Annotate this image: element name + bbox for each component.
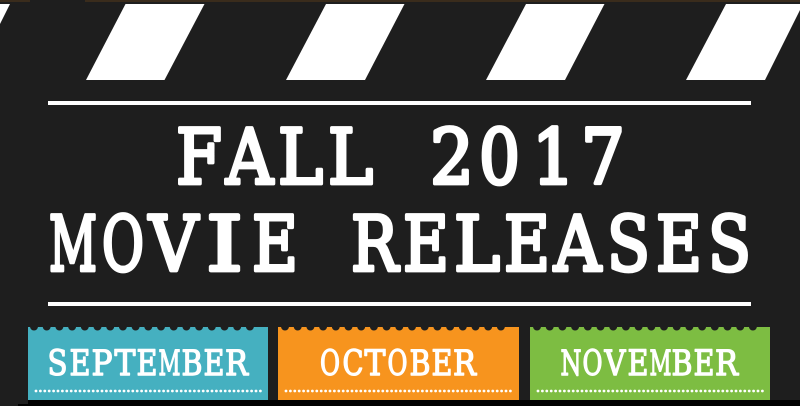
ticket: october: E [432, 344, 452, 384]
bottom divider [48, 302, 751, 306]
title: A [225, 112, 274, 202]
ticket: september: R [225, 344, 249, 384]
title: E [403, 200, 449, 288]
title: S [708, 200, 751, 288]
ticket: october: C [342, 344, 364, 384]
ticket: november: B [672, 344, 692, 384]
title [49, 112, 751, 288]
ticket: october: T [364, 344, 386, 384]
ticket: september: E [136, 344, 158, 384]
ticket: november: O [582, 344, 602, 384]
title: L [328, 112, 373, 202]
title: 0 [479, 112, 520, 202]
title: S [607, 200, 650, 288]
top divider [48, 101, 751, 105]
ticket: november [530, 326, 770, 400]
ticket: september: S [48, 344, 68, 384]
ticket: september: E [204, 344, 224, 384]
title: L [454, 200, 500, 288]
title: R [351, 200, 400, 288]
ticket: september: P [92, 344, 112, 384]
ticket: november: E [694, 344, 714, 384]
title: F [176, 112, 222, 202]
title: E [656, 200, 702, 288]
title: V [148, 200, 199, 288]
ticket: november: M [650, 344, 672, 384]
ticket: october: O [388, 344, 408, 384]
ticket: october: R [453, 344, 477, 384]
ticket: september: T [114, 344, 136, 384]
title: 1 [532, 112, 575, 202]
title: E [252, 200, 298, 288]
ticket: september: M [158, 344, 180, 384]
ticket: november: N [560, 344, 582, 384]
title: A [553, 200, 602, 288]
title: L [278, 112, 323, 202]
title: 2 [430, 112, 474, 202]
title: 7 [581, 112, 625, 202]
ticket: november: V [604, 344, 626, 384]
ticket: september: E [70, 344, 90, 384]
ticket: october [278, 326, 519, 400]
title: I [206, 200, 243, 288]
title: O [102, 200, 144, 288]
clapper stripes [0, 4, 800, 80]
ticket: october: O [320, 344, 340, 384]
title: E [504, 200, 550, 288]
ticket: october: B [410, 344, 430, 384]
ticket: september: B [182, 344, 202, 384]
title: M [49, 200, 97, 288]
ticket: november: E [628, 344, 648, 384]
ticket: september [28, 326, 268, 400]
ticket: november: R [715, 344, 739, 384]
